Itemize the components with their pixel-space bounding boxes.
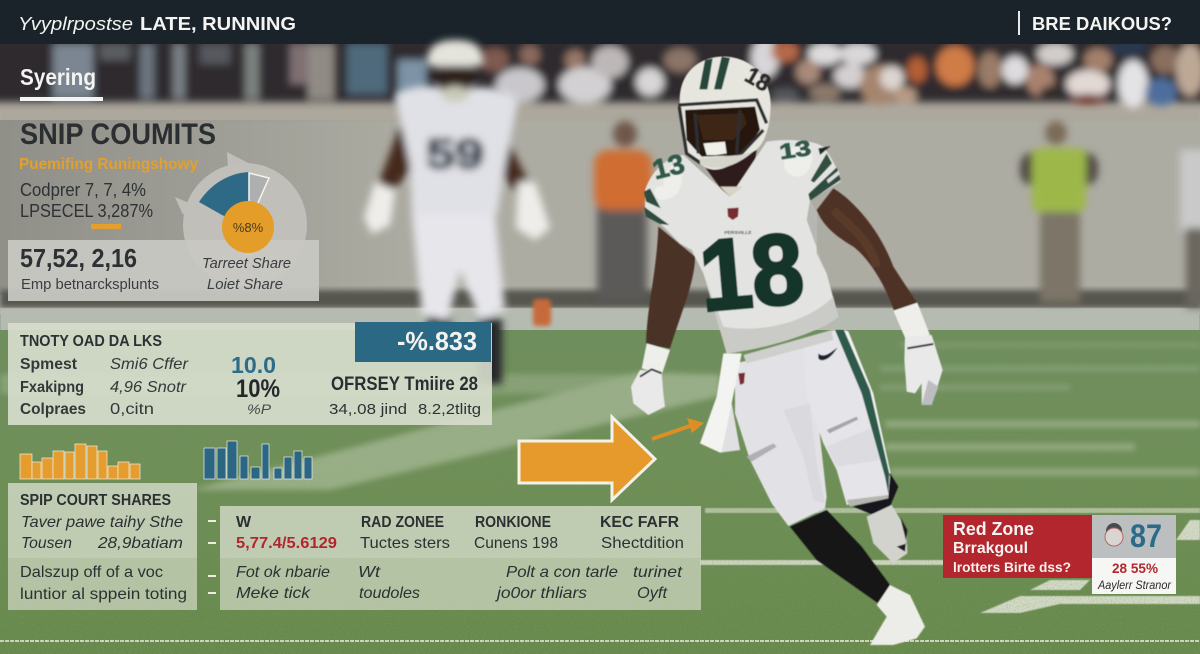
panel: totals table: 10.0	[231, 352, 276, 378]
panel: shares: SPIP COURT SHARES	[20, 492, 171, 509]
panel: target share: Loiet Share	[207, 276, 283, 293]
callout: score card: 87	[1130, 518, 1162, 554]
panel: red zone table: Wt	[358, 564, 381, 581]
top bar backing strip	[0, 0, 1200, 44]
right edge official	[1180, 150, 1200, 308]
bar chart: orange	[20, 444, 140, 479]
background player 59: 59	[426, 130, 484, 177]
field and turf	[0, 308, 1200, 654]
callout: red zone breakout: Red Zone	[953, 519, 1034, 539]
snip counts text block	[19, 118, 216, 229]
panel: target share: 57,52, 2,16	[20, 243, 137, 273]
yellow vest official	[1020, 121, 1098, 303]
panel: shares: Dalszup off of a voc	[20, 564, 163, 581]
panel: totals table	[8, 322, 492, 425]
panel: red zone table: toudoles	[359, 585, 420, 602]
panel: totals table: Spmest	[20, 356, 78, 373]
panel: red zone table: Cunens 198	[474, 535, 558, 552]
upper body: 18	[741, 62, 775, 97]
panel: red zone table: 5,77.4/5.6129	[236, 535, 337, 552]
panel: totals table: 34,.08 jind	[329, 401, 407, 418]
top bar: LATE, RUNNING	[140, 14, 296, 34]
panel: shares: Tousen	[21, 535, 72, 552]
panel: totals table: -%.833	[397, 326, 477, 356]
top bar: Yvyplrpostse	[18, 14, 133, 34]
panel: shares: luntior al sppein toting	[20, 586, 187, 603]
panel: red zone table: turinet	[633, 564, 683, 581]
orange pylon	[533, 299, 551, 326]
wristbands and gloves	[631, 303, 943, 415]
panel: target share: Tarreet Share	[202, 255, 291, 272]
panel: totals table: OFRSEY Tmiire 28	[331, 374, 478, 395]
bar chart: blue	[204, 441, 312, 479]
panel: totals table: TNOTY OAD DA LKS	[20, 333, 162, 350]
panel: red zone table	[220, 506, 701, 610]
legs and shoes	[700, 330, 925, 645]
panel: red zone table: RONKIONE	[475, 514, 551, 531]
blurred crowd	[0, 36, 1200, 108]
panel: shares: 28,9batiam	[97, 535, 183, 552]
upper body	[644, 57, 917, 353]
orange vest official	[594, 121, 652, 300]
panel: shares	[8, 483, 197, 610]
panel: red zone table: Fot ok nbarie	[236, 564, 330, 581]
panel: red zone table: Tuctes sters	[360, 535, 450, 552]
gauge donut chart	[175, 152, 307, 287]
background player 59	[364, 40, 550, 384]
main player	[631, 57, 943, 645]
panel: totals table: 10%	[236, 375, 280, 403]
panel: totals table: Fxakipng	[20, 379, 84, 396]
top bar: BRE DAIKOUS?	[1032, 14, 1172, 34]
callout: red zone breakout: Brrakgoul	[953, 540, 1028, 557]
panel: totals table: %P	[247, 401, 272, 417]
callout: red zone breakout	[943, 515, 1092, 578]
panel: red zone table: Polt a con tarle	[506, 564, 618, 581]
callout: score card	[1092, 515, 1176, 594]
upper body: 18	[695, 212, 808, 333]
stadium wall background	[0, 44, 1200, 314]
panel: totals table: 4,96 Snotr	[110, 379, 187, 396]
section tab heading	[20, 64, 103, 101]
panel: target share	[8, 201, 319, 301]
panel: red zone table: Meke tick	[236, 585, 311, 602]
panel: totals table: Smi6 Cffer	[110, 356, 189, 373]
small orange arrow	[652, 418, 704, 439]
panel: target share: %8%	[233, 220, 264, 235]
row dashes	[208, 520, 216, 594]
panel: red zone table: Shectdition	[601, 535, 684, 552]
section tab heading: Syering	[20, 64, 96, 90]
panel: totals table: 0,citn	[110, 401, 154, 418]
callout: red zone breakout: lrotters Birte dss?	[953, 559, 1071, 575]
callout: score card: 28 55%	[1112, 560, 1159, 576]
snip counts text block: LPSECEL 3,287%	[20, 201, 153, 221]
panel: red zone table: Oyft	[637, 585, 668, 602]
panel: target share: Emp betnarcksplunts	[21, 276, 159, 293]
upper body: 13	[778, 136, 813, 164]
upper body: 13	[649, 148, 688, 185]
panel: red zone table: jo0or thliars	[495, 585, 587, 602]
panel: totals table: Colpraes	[20, 401, 86, 418]
icon: helmet	[1105, 523, 1123, 546]
callout: score card: Aaylerr Stranor	[1097, 578, 1172, 592]
panel: shares: Taver pawe taihy Sthe	[21, 514, 183, 531]
large orange arrow	[519, 417, 655, 500]
snip counts text block: SNIP COUMITS	[20, 118, 216, 151]
snip counts text block: Puemifing Runingshowy	[19, 156, 198, 173]
panel: red zone table: KEC FAFR	[600, 514, 679, 531]
upper body: PERSVILLE	[724, 230, 752, 236]
panel: red zone table: W	[236, 514, 252, 531]
snip counts text block: Codprer 7, 7, 4%	[20, 180, 146, 200]
panel: totals table: 8.2,2tlitg	[418, 401, 481, 418]
panel: red zone table: RAD ZONEE	[361, 514, 444, 531]
top bar	[18, 11, 1172, 35]
